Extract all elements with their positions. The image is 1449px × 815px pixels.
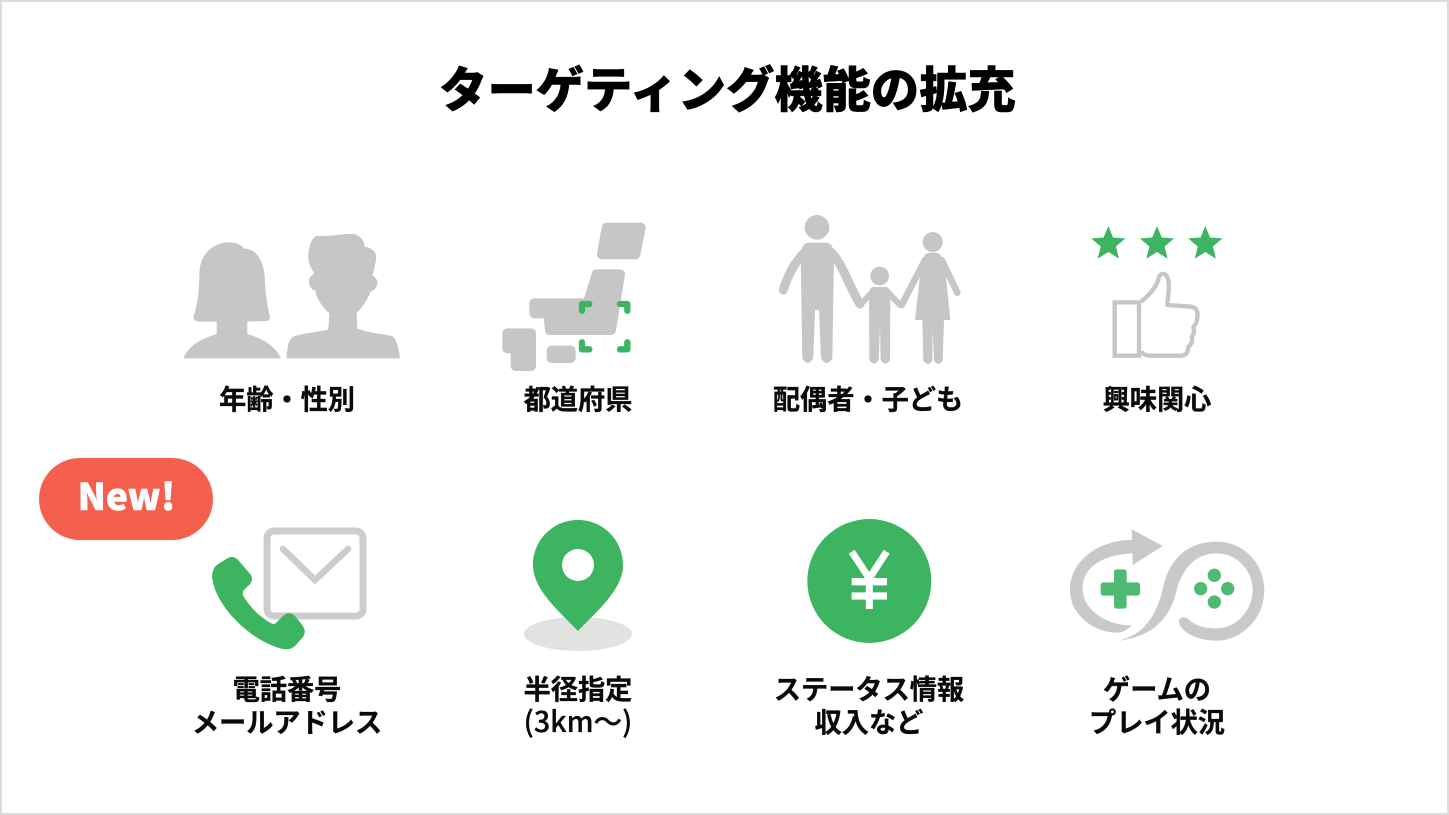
icon: game controller loop with arrow xyxy=(1070,529,1264,641)
label: game play status: プレイ状況 xyxy=(1089,700,1225,740)
icon: woman and man silhouettes xyxy=(183,234,400,358)
label: prefecture: 都道府県 xyxy=(524,377,632,417)
label: game play status: ゲームの xyxy=(1103,667,1211,707)
icon: envelope xyxy=(267,531,363,616)
panel: spouse and children xyxy=(773,215,963,417)
label: status information: ステータス情報 xyxy=(774,667,964,707)
panel: game play status xyxy=(1070,529,1264,740)
panel: age and gender xyxy=(183,234,400,417)
label: radius targeting: (3km〜) xyxy=(524,700,632,741)
icon: phone handset xyxy=(213,558,304,649)
label: phone number and email: 電話番号 xyxy=(233,667,341,707)
badge: New xyxy=(39,458,213,540)
label: spouse and children: 配偶者・子ども xyxy=(773,377,963,417)
icon: map pin with shadow xyxy=(524,520,632,651)
badge: New: New! xyxy=(78,467,175,521)
icon: yen coin xyxy=(807,519,931,643)
panel: radius targeting xyxy=(524,520,632,741)
label: phone number and email: メールアドレス xyxy=(192,700,382,740)
panel: status information xyxy=(774,519,964,740)
panel: phone number and email xyxy=(192,531,382,740)
icon: family holding hands xyxy=(783,215,957,364)
icon: Japan map with green target corners xyxy=(507,228,641,366)
title: ターゲティング機能の拡充 xyxy=(439,51,1016,121)
label: radius targeting: 半径指定 xyxy=(524,667,632,707)
label: age and gender: 年齢・性別 xyxy=(219,377,355,417)
panel: prefecture xyxy=(507,228,641,417)
label: interests: 興味関心 xyxy=(1103,377,1211,417)
icon: three stars and thumbs up xyxy=(1091,226,1222,356)
panel: interests xyxy=(1091,226,1222,417)
label: status information: 収入など xyxy=(815,700,923,740)
